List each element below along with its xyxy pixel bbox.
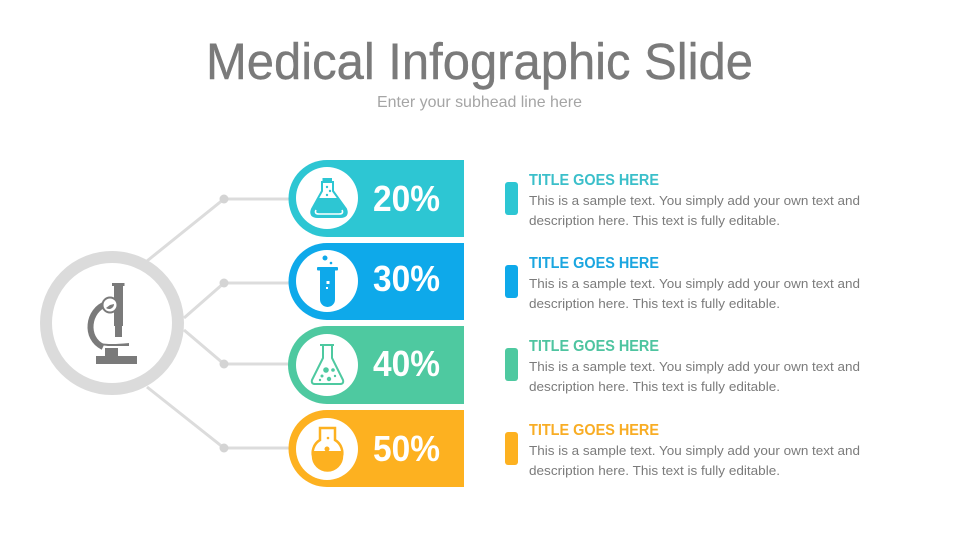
text block: item 1: This is a sample text. You simply add your own text and <box>529 193 860 208</box>
value: 50%: 50% <box>373 428 440 469</box>
icon: round flask <box>311 178 347 217</box>
text block: item 4: This is a sample text. You simply add your own text and <box>529 443 860 458</box>
text block: item 3: This is a sample text. You simply add your own text and <box>529 359 860 374</box>
title: Medical Infographic Slide <box>206 33 753 90</box>
icon: microscope <box>91 283 137 364</box>
text block: item 2 <box>505 255 860 311</box>
central microscope badge <box>46 257 178 389</box>
panel: 50% bar <box>288 410 464 487</box>
text block: item 1: description here. This text is fully editable. <box>529 213 780 228</box>
text block: item 3: description here. This text is fully editable. <box>529 379 780 394</box>
panel: 40% bar <box>288 326 464 404</box>
text block: item 3: TITLE GOES HERE <box>529 338 659 355</box>
text block: item 2: TITLE GOES HERE <box>529 255 659 272</box>
text block: item 4: description here. This text is fully editable. <box>529 463 780 478</box>
text block: item 2: This is a sample text. You simply add your own text and <box>529 276 860 291</box>
icon: conical flask <box>312 345 343 384</box>
panel: 30% bar <box>288 243 464 320</box>
text block: item 4 <box>505 422 860 478</box>
connector lines <box>147 194 290 452</box>
text block: item 1 <box>505 172 860 228</box>
text block: item 3 <box>505 338 860 394</box>
value: 30%: 30% <box>373 258 440 299</box>
icon: test tube <box>317 256 338 307</box>
icon: boiling flask <box>313 428 342 470</box>
value: 40%: 40% <box>373 343 440 384</box>
text block: item 2: description here. This text is fully editable. <box>529 296 780 311</box>
text block: item 4: TITLE GOES HERE <box>529 422 659 439</box>
text block: item 1: TITLE GOES HERE <box>529 172 659 189</box>
subhead: Enter your subhead line here <box>377 94 582 111</box>
panel: 20% bar <box>288 160 464 237</box>
value: 20%: 20% <box>373 178 440 219</box>
